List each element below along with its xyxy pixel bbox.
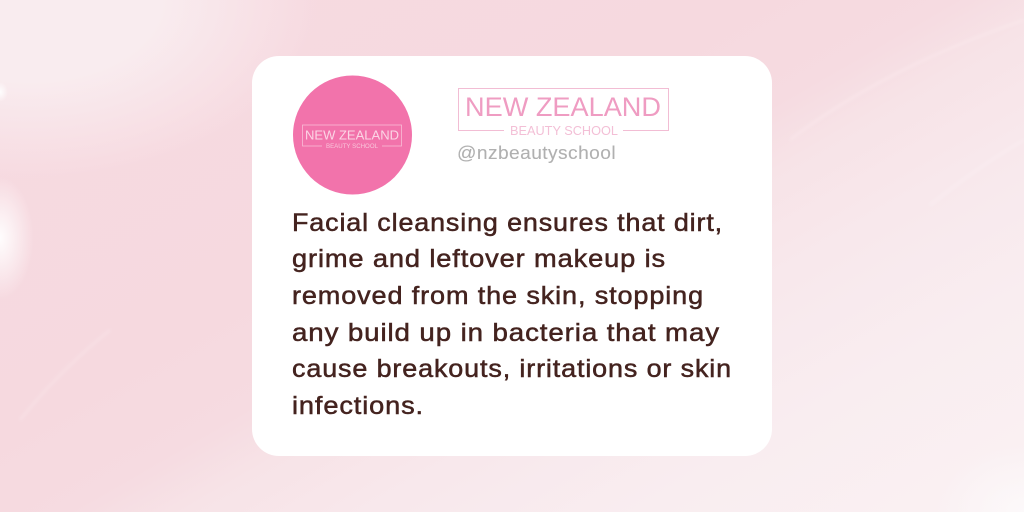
icon: round pink logo badge bbox=[293, 76, 412, 194]
logo: New Zealand Beauty School wordmark: NEW ZEALAND bbox=[465, 92, 661, 122]
text block: facial cleansing message: cause breakouts, irritations or skin bbox=[292, 355, 732, 383]
text block: facial cleansing message bbox=[292, 209, 732, 420]
logo: New Zealand Beauty School wordmark: BEAUTY SCHOOL bbox=[510, 123, 618, 138]
icon: round pink logo badge: NEW ZEALAND bbox=[305, 128, 399, 142]
text block: facial cleansing message: Facial cleansing ensures that dirt, bbox=[292, 209, 723, 237]
text block: facial cleansing message: grime and leftover makeup is bbox=[292, 245, 666, 273]
text block: facial cleansing message: infections. bbox=[292, 392, 424, 420]
icon: round pink logo badge: BEAUTY SCHOOL bbox=[326, 143, 378, 150]
social handle: @nzbeautyschool bbox=[457, 143, 616, 163]
logo: New Zealand Beauty School wordmark bbox=[458, 88, 668, 138]
text block: facial cleansing message: any build up in bacteria that may bbox=[292, 319, 720, 347]
text block: facial cleansing message: removed from the skin, stopping bbox=[292, 282, 704, 310]
